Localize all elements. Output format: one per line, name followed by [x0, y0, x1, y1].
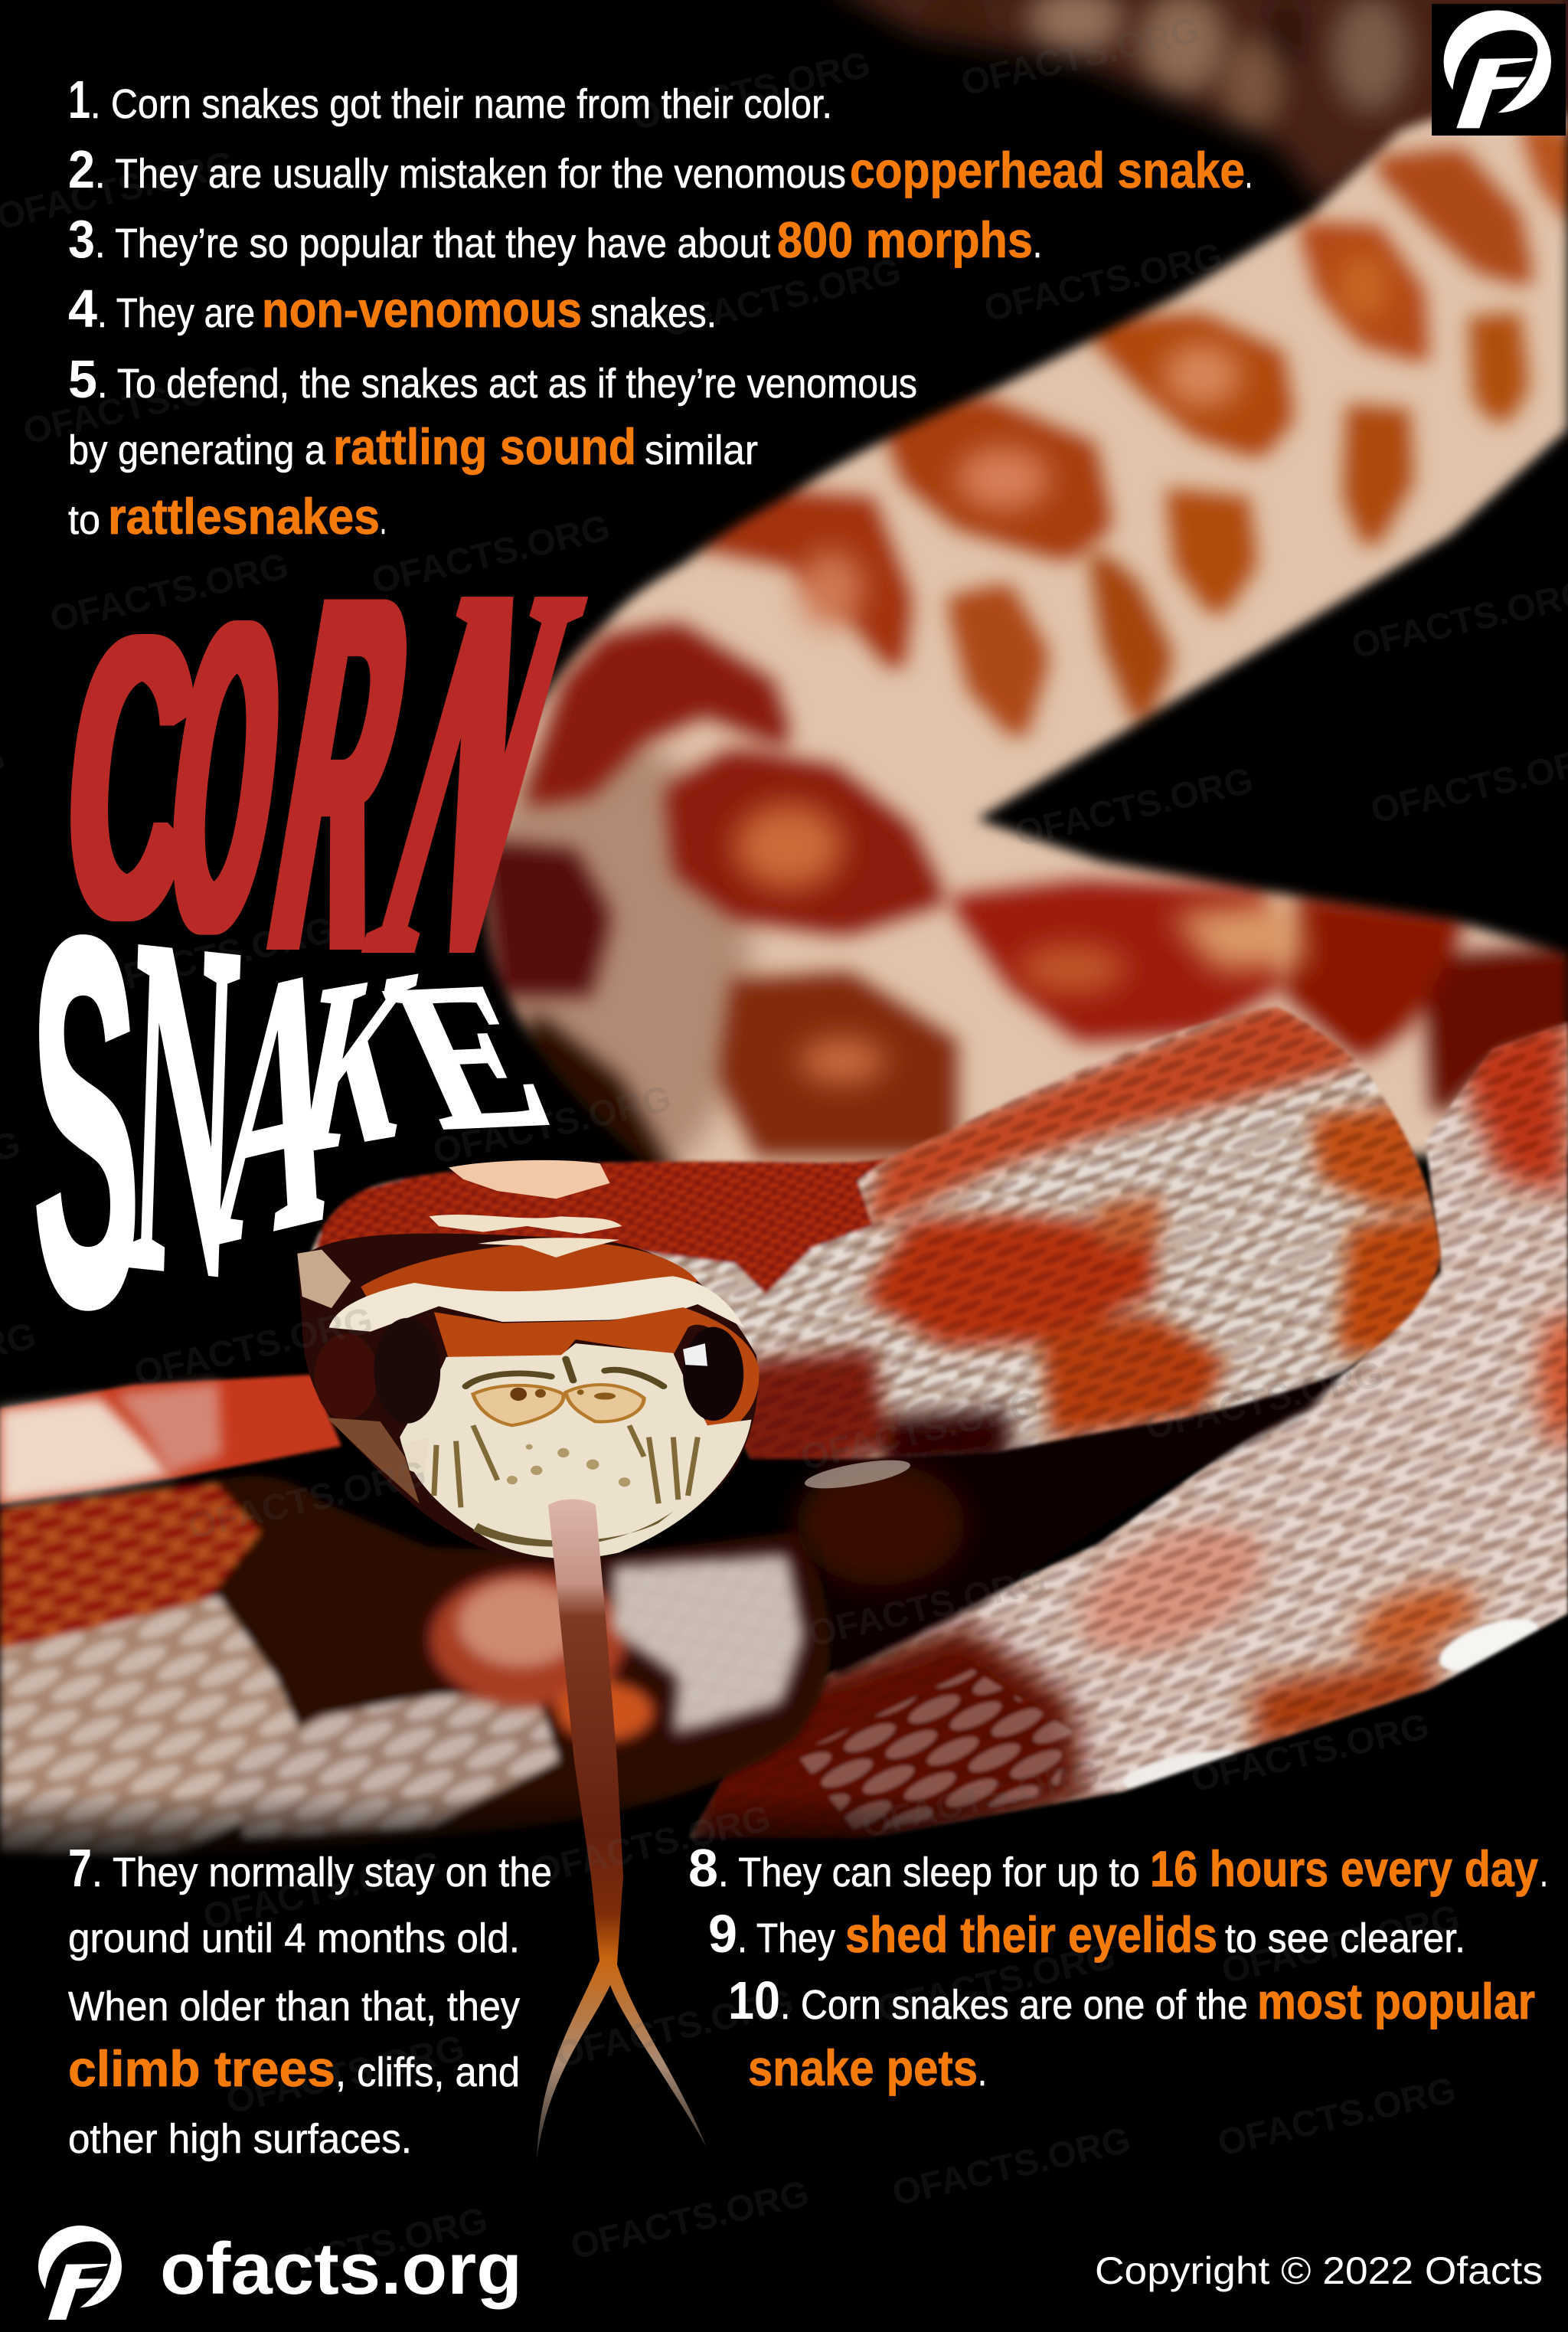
- title: SNAKE: N: [123, 834, 245, 1379]
- watermark pattern: OFACTS.ORG: [0, 144, 239, 238]
- coil: orange patch under head: [429, 1570, 655, 1742]
- snake: lower right coil: [689, 1003, 1568, 1869]
- watermark pattern: OFACTS.ORG: [1214, 2070, 1460, 2164]
- watermark pattern: OFACTS.ORG: [131, 1300, 377, 1395]
- fact 7: climb trees: [68, 2040, 335, 2097]
- head: chin speckles and scale lines: [434, 1425, 697, 1546]
- snake: dark shadow wedge below neck: [815, 1372, 1344, 1677]
- footer copyright: Copyright © 2022 Ofacts: [1095, 2249, 1543, 2292]
- fact 7: [68, 1838, 552, 2162]
- fact 8: 8: [688, 1838, 718, 1898]
- watermark pattern: OFACTS.ORG: [629, 44, 874, 139]
- fact 8: . They can sleep for up to: [718, 1850, 1140, 1895]
- head: orange crown: [361, 1241, 697, 1304]
- watermark pattern: OFACTS.ORG: [797, 1385, 1043, 1479]
- coil: scales centre bottom: [222, 1689, 559, 1838]
- fact 3: . They’re so popular that they have about: [95, 221, 770, 267]
- snake: neck coil: [291, 996, 1455, 1532]
- watermark pattern: OFACTS.ORG: [185, 1454, 430, 1548]
- snake: orange back section left of head: [0, 1375, 341, 1504]
- title: CORN: R: [247, 489, 437, 1058]
- fact 2: [68, 139, 1253, 199]
- head: pale snout: [400, 1343, 751, 1558]
- snake: blurred main body band: [459, 107, 1568, 1195]
- head: white band: [329, 1276, 744, 1332]
- fact 8: .: [1540, 1850, 1548, 1895]
- snake: blurred far coil at top: [817, 0, 1568, 205]
- fact 5: rattlesnakes: [108, 488, 380, 545]
- fact 10: . Corn snakes are one of the: [780, 1982, 1248, 2028]
- watermark pattern: OFACTS.ORG: [552, 1982, 798, 2076]
- fact 3: 3: [68, 209, 95, 269]
- fact 9: to see clearer.: [1225, 1915, 1465, 1961]
- snake: small white scales below neck: [803, 1454, 912, 1494]
- snake: left lower coil: [0, 1470, 858, 1869]
- fact 5: [68, 349, 917, 545]
- snake: head: [297, 1160, 759, 1562]
- fact 4: snakes.: [590, 290, 717, 336]
- coil: muted scales on dark red lower section: [796, 1670, 1072, 1834]
- fact 3: [68, 209, 1042, 269]
- watermark pattern: OFACTS.ORG: [567, 2173, 813, 2268]
- fact 10: 10: [728, 1971, 780, 2030]
- title: CORN: O: [152, 529, 299, 1025]
- watermark pattern: OFACTS.ORG: [47, 546, 292, 640]
- fact 3: .: [1033, 221, 1042, 267]
- coil: red netted section: [0, 1482, 260, 1658]
- fact 5: .: [380, 497, 387, 543]
- band: darker web at the turn: [459, 735, 750, 1195]
- head: nose plates: [473, 1385, 644, 1425]
- fact 5: . To defend, the snakes act as if they’re venomous: [97, 361, 917, 407]
- head: top cream marks: [297, 1160, 622, 1308]
- fact 9: shed their eyelids: [845, 1906, 1217, 1963]
- fact 1: . Corn snakes got their name from their color.: [90, 81, 832, 127]
- title: CORN: C: [54, 550, 207, 1004]
- fact 10: most popular: [1257, 1973, 1535, 2029]
- fact 7: ground until 4 months old.: [68, 1915, 520, 1961]
- fact 7: other high surfaces.: [68, 2116, 412, 2162]
- fact 5: to: [68, 497, 100, 543]
- neck: dark red left of neck: [735, 1179, 873, 1294]
- watermark pattern: OFACTS.ORG: [529, 1798, 775, 1892]
- fact 9: 9: [708, 1904, 737, 1964]
- band: orange saddle blotches: [490, 130, 1568, 1195]
- watermark pattern: OFACTS.ORG: [430, 1078, 675, 1173]
- coil: white scales right of tongue: [612, 1555, 804, 1735]
- footer logo icon: [38, 2226, 122, 2320]
- watermark pattern: OFACTS.ORG: [659, 251, 905, 345]
- fact 8: [688, 1838, 1548, 1898]
- watermark pattern: OFACTS.ORG: [1218, 1898, 1464, 1992]
- watermark pattern: OFACTS.ORG: [20, 358, 266, 453]
- fact 7: 7: [68, 1838, 92, 1898]
- fact 7: . They normally stay on the: [92, 1850, 552, 1895]
- fact 2: . They are usually mistaken for the venomous: [95, 151, 846, 197]
- title: SNAKE: E: [360, 940, 579, 1173]
- fact 5: rattling sound: [333, 418, 636, 475]
- fact 9: [708, 1904, 1465, 1964]
- fact 7: , cliffs, and: [335, 2049, 520, 2095]
- fact 1: 1: [68, 70, 90, 129]
- title: SNAKE: S: [28, 830, 143, 1413]
- head: right eye: [683, 1327, 743, 1421]
- band: lighter blotch centres: [735, 255, 1386, 1082]
- footer site name: ofacts.org: [160, 2228, 522, 2310]
- fact 5: 5: [68, 349, 97, 409]
- watermark pattern: OFACTS.ORG: [200, 1844, 446, 1938]
- head: orange mask band: [434, 1307, 759, 1435]
- watermark pattern: OFACTS.ORG: [93, 910, 338, 1004]
- fact 5: by generating a: [68, 427, 326, 473]
- fact 10: snake pets: [748, 2039, 978, 2096]
- logo: top right: [1432, 4, 1566, 136]
- title: SNAKE: K: [281, 916, 436, 1206]
- watermark pattern: OFACTS.ORG: [874, 1936, 1119, 2030]
- fact 1: [68, 70, 832, 129]
- fact 9: . They: [737, 1915, 835, 1961]
- watermark pattern: OFACTS.ORG: [1142, 1354, 1387, 1448]
- watermark pattern: OFACTS.ORG: [1011, 760, 1257, 855]
- head: outline base: [297, 1234, 758, 1562]
- fact 5: similar: [645, 427, 758, 473]
- fact 4: 4: [68, 279, 97, 339]
- watermark pattern: OFACTS.ORG: [805, 1561, 1050, 1655]
- fact 4: non-venomous: [262, 281, 582, 338]
- fact 10: [728, 1971, 1535, 2096]
- watermark pattern: OFACTS.ORG: [889, 2120, 1135, 2214]
- fact 4: [68, 279, 717, 339]
- watermark pattern: OFACTS.ORG: [958, 10, 1204, 104]
- snake: bottom fade into black: [0, 1792, 1568, 1869]
- fact 2: copperhead snake: [850, 142, 1245, 198]
- title: CORN: [54, 469, 618, 1071]
- title: CORN: N: [332, 469, 618, 1071]
- snake: forked tongue: [537, 1500, 707, 2160]
- watermark pattern: OFACTS.ORG: [858, 1752, 1104, 1846]
- watermark pattern: OFACTS.ORG: [368, 508, 614, 602]
- watermark pattern: OFACTS.ORG: [981, 236, 1227, 330]
- snake: maroon patch below neck: [796, 1463, 965, 1585]
- fact 2: 2: [68, 139, 95, 199]
- watermark pattern: OFACTS.ORG: [223, 2028, 469, 2122]
- head: brow lines: [466, 1359, 664, 1386]
- head: left eye: [315, 1318, 440, 1503]
- neck: red netted back behind head: [302, 1153, 896, 1302]
- title: SNAKE: A: [198, 883, 357, 1326]
- title: SNAKE: [28, 830, 579, 1413]
- fact 7: When older than that, they: [68, 1984, 520, 2029]
- fact 2: .: [1245, 151, 1253, 197]
- coil: tan scales left: [0, 1597, 322, 1857]
- watermark pattern: OFACTS.ORG: [246, 2200, 492, 2294]
- fact 4: . They are: [97, 290, 255, 336]
- fact 3: 800 morphs: [777, 211, 1033, 268]
- watermark pattern: OFACTS.ORG: [1187, 1706, 1433, 1801]
- fact 10: .: [978, 2049, 987, 2095]
